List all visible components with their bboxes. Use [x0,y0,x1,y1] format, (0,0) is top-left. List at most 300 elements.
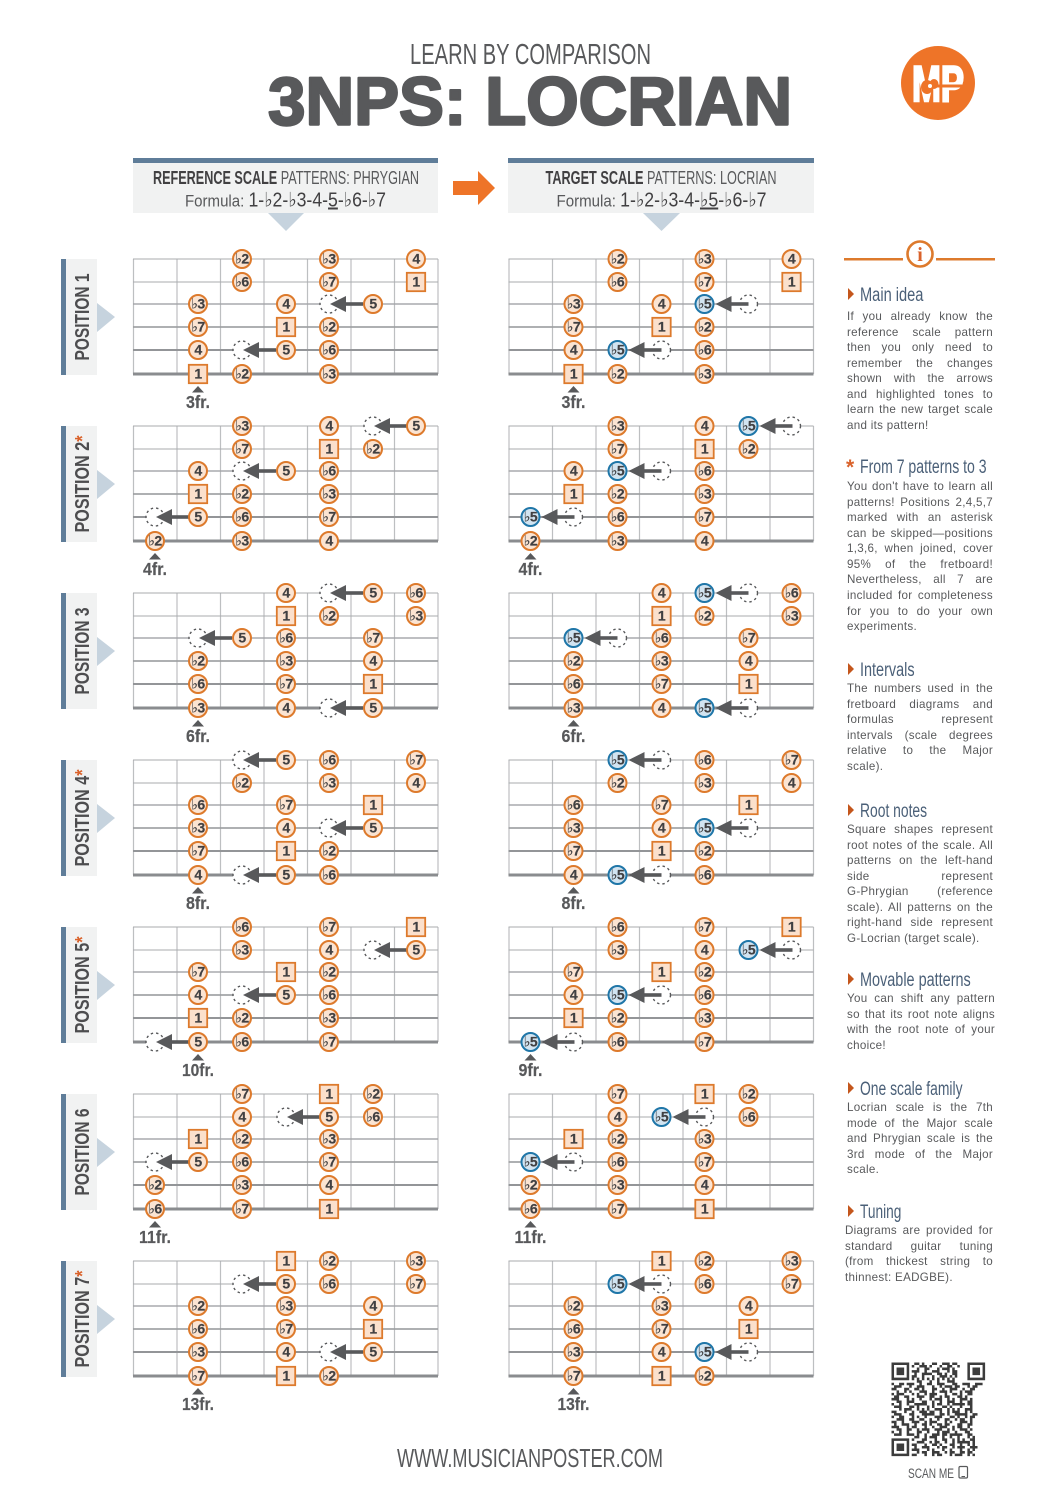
notes: ♭7 [611,1200,625,1216]
notes: ♭2 [235,366,249,382]
fret label: 3fr. [186,392,210,412]
notes: ♭6 [698,462,712,478]
arrows: changed notes: 5 [412,942,420,958]
text block: and its pattern! [847,419,928,432]
notes: 4 [570,866,578,882]
text block: Nevertheless, all 7 are [847,573,993,586]
notes: ♭2 [611,1130,625,1146]
notes: ♭6 [235,1154,249,1170]
notes: 4 [570,986,578,1002]
notes: 4 [745,652,753,668]
notes: 4 [325,532,333,548]
notes: ♭2 [322,608,336,624]
notes [564,1252,800,1385]
notes: ♭7 [279,1320,293,1336]
notes: ♭3 [191,700,205,716]
text block: 1,3,6, when joined, cover [847,542,993,555]
heading asterisk: * [846,456,854,479]
notes: ♭2 [742,440,756,456]
arrows: changed notes: 5 [282,462,290,478]
arrows: changed notes: ♭5 [611,986,625,1002]
notes: ♭3 [698,366,712,382]
notes: ♭7 [235,440,249,456]
panel: tuning [845,1202,993,1284]
text block: intervals (scale degrees [847,729,993,742]
arrows: changed notes: 5 [369,584,377,600]
notes: ♭7 [698,918,712,934]
notes: 1 [369,796,377,812]
arrows: changed notes [608,1275,758,1361]
notes: ♭6 [611,1034,625,1050]
text block: Locrian scale is the 7th [847,1101,993,1114]
text block: for you to do your own [847,604,993,618]
logo: MP guitar badge: MP [912,56,964,112]
notes: ♭6 [322,866,336,882]
panel: from 7 patterns to 3 [846,456,993,633]
heading marker [848,973,854,985]
notes: ♭6 [409,584,423,600]
notes: ♭2 [366,1086,380,1102]
notes: ♭3 [698,774,712,790]
notes: ♭6 [567,796,581,812]
notes: ♭7 [322,274,336,290]
notes: ♭7 [698,1034,712,1050]
arrows: changed notes [189,584,382,717]
notes: ♭2 [322,842,336,858]
notes: ♭7 [366,630,380,646]
position tab 2: POSITION 2* [71,435,94,532]
notes: ♭2 [524,532,538,548]
notes: 1 [282,964,290,980]
header: reference scale: REFERENCE SCALE PATTERNS: PHRYGIAN [153,167,419,188]
notes: ♭7 [322,1154,336,1170]
panel: movable patterns [847,970,995,1052]
position tab 7 [61,1261,115,1377]
arrows: changed notes: 5 [282,866,290,882]
arrows: changed notes: 5 [194,508,202,524]
text block: thinnest: EADGBE). [845,1271,953,1284]
text block: relative to the Major [847,744,993,757]
footer url: WWW.MUSICIANPOSTER.COM [397,1443,663,1473]
text block: remember the changes [847,357,993,370]
notes: 1 [369,1320,377,1336]
position tab 1 [61,259,115,375]
notes: ♭2 [698,842,712,858]
text block: root notes of the scale. All [847,839,993,852]
text block: You can shift any pattern [847,992,995,1005]
notes: ♭6 [322,342,336,358]
notes: ♭6 [322,462,336,478]
fret label: 4fr. [518,559,542,579]
text block [847,823,993,945]
notes: ♭6 [235,274,249,290]
notes: ♭2 [611,486,625,502]
notes: ♭2 [567,1298,581,1314]
text block: patterns on the left-hand [847,854,993,867]
notes: 4 [412,250,420,266]
text block: You don't have to learn all [847,480,993,493]
position tab 3: POSITION 3 [71,608,94,694]
notes [189,584,425,717]
notes: 4 [570,342,578,358]
icon: info with rule lines [844,242,995,266]
header: reference scale [133,158,438,231]
notes: 4 [282,584,290,600]
arrows: changed notes: 5 [194,1154,202,1170]
position tab 4: POSITION 4* [71,769,94,866]
notes: ♭6 [698,1276,712,1292]
notes: 1 [570,366,578,382]
notes: ♭6 [366,1108,380,1124]
notes: ♭3 [409,1252,423,1268]
fret label: 13fr. [558,1394,590,1414]
position tab 7: POSITION 7* [71,1270,94,1367]
notes: 1 [745,1320,753,1336]
notes: ♭3 [322,1010,336,1026]
notes: ♭3 [698,250,712,266]
notes: 1 [325,1086,333,1102]
notes: 4 [412,774,420,790]
arrows: changed notes: ♭5 [567,630,581,646]
notes: 1 [658,1252,666,1268]
heading marker [848,804,854,816]
notes: 1 [325,440,333,456]
arrows: changed notes [564,584,758,717]
notes: 4 [282,700,290,716]
notes: 4 [194,342,202,358]
notes: ♭7 [235,1200,249,1216]
notes: 1 [570,486,578,502]
notes: 4 [282,296,290,312]
notes [564,584,800,717]
arrows: changed notes [146,941,425,1051]
position tab 1: POSITION 1 [71,274,94,360]
notes: ♭3 [698,486,712,502]
notes: ♭2 [191,652,205,668]
notes: ♭3 [279,1298,293,1314]
notes: ♭2 [235,486,249,502]
notes: ♭2 [148,532,162,548]
notes: ♭3 [322,366,336,382]
notes: 1 [194,486,202,502]
arrows: changed notes [608,751,758,884]
notes [564,250,801,383]
notes: ♭6 [611,274,625,290]
notes: ♭3 [235,418,249,434]
notes: 1 [282,1368,290,1384]
notes: ♭7 [235,1086,249,1102]
fret label: 9fr. [518,1060,542,1080]
text block: and Phrygian scale is the [847,1132,993,1145]
notes: 1 [658,842,666,858]
notes: ♭7 [698,508,712,524]
notes: 1 [570,1010,578,1026]
notes: ♭7 [191,318,205,334]
heading: movable patterns: Movable patterns [860,970,971,990]
heading: tuning: Tuning [860,1202,901,1222]
notes: ♭6 [698,866,712,882]
position tab 5 [61,927,115,1043]
heading marker [848,663,854,675]
notes: ♭3 [611,418,625,434]
text block: (from thickest string to [845,1255,993,1268]
text block: right-hand side represent [847,916,993,929]
notes: ♭2 [191,1298,205,1314]
notes: 4 [701,1176,709,1192]
notes: ♭6 [322,1276,336,1292]
arrows: changed notes: ♭5 [698,1344,712,1360]
text block [847,310,993,432]
notes: 1 [788,918,796,934]
arrows: changed notes: ♭5 [698,820,712,836]
notes: ♭7 [279,676,293,692]
notes: 1 [194,366,202,382]
notes: ♭7 [567,842,581,858]
notes: 1 [701,1200,709,1216]
notes: ♭3 [409,608,423,624]
notes: ♭7 [742,630,756,646]
panel: main idea [847,284,993,432]
notes: 1 [325,1200,333,1216]
notes [522,417,758,550]
title: 3NPS Locrian: 3NPS: LOCRIAN [268,64,792,140]
text block [847,480,993,633]
notes: ♭2 [366,440,380,456]
text block [847,1101,993,1176]
arrows: changed notes: 5 [282,986,290,1002]
notes: 1 [658,964,666,980]
heading marker [848,288,854,300]
text block: marked with an asterisk [847,511,993,524]
notes [146,1085,382,1218]
notes: ♭3 [235,942,249,958]
notes: ♭3 [191,296,205,312]
notes: ♭6 [191,676,205,692]
arrows: changed notes: 5 [369,296,377,312]
notes: 4 [194,462,202,478]
notes: 1 [701,1086,709,1102]
fret label: 10fr. [182,1060,214,1080]
text block: 95% of the fretboard! [847,558,993,571]
notes: ♭6 [322,752,336,768]
notes: ♭2 [322,1368,336,1384]
notes: ♭6 [148,1200,162,1216]
notes: ♭2 [698,1252,712,1268]
notes: ♭2 [148,1176,162,1192]
notes: ♭2 [235,250,249,266]
text block: experiments. [847,620,917,633]
notes: ♭2 [698,964,712,980]
notes: ♭6 [698,752,712,768]
notes: ♭3 [567,820,581,836]
notes: 4 [614,1108,622,1124]
notes: 4 [701,418,709,434]
notes: ♭3 [322,774,336,790]
notes: ♭6 [611,1154,625,1170]
fret label: 4fr. [143,559,167,579]
notes: ♭2 [742,1086,756,1102]
notes: 4 [238,1108,246,1124]
fretboard: position 7 target [508,1252,814,1414]
notes: 4 [369,1298,377,1314]
notes: ♭7 [567,964,581,980]
notes: ♭7 [322,918,336,934]
notes: 1 [282,1252,290,1268]
notes: 4 [658,296,666,312]
fret label: 3fr. [562,392,586,412]
panel: intervals [847,660,993,773]
text block: Square shapes represent [847,823,993,836]
notes: ♭7 [191,842,205,858]
notes: ♭6 [279,630,293,646]
text block: If you already know the [847,310,993,323]
arrows: changed notes: ♭5 [611,866,625,882]
notes: ♭6 [191,796,205,812]
notes: ♭7 [785,752,799,768]
notes: ♭3 [191,1344,205,1360]
notes: 4 [325,942,333,958]
text block: then you only need to [847,341,993,354]
heading: one scale family: One scale family [860,1078,963,1100]
arrows: changed notes: 5 [369,700,377,716]
text block [847,992,995,1052]
notes: ♭3 [611,942,625,958]
notes: 1 [701,440,709,456]
position tab 4 [61,760,115,876]
notes: 1 [194,1010,202,1026]
notes: 4 [788,250,796,266]
notes: ♭7 [785,1276,799,1292]
notes: 1 [570,1130,578,1146]
notes: ♭7 [611,440,625,456]
notes: ♭2 [611,366,625,382]
heading marker [848,1082,854,1094]
notes [146,417,382,550]
arrows: changed notes: ♭5 [611,342,625,358]
notes: 1 [745,796,753,812]
title group [268,39,792,140]
notes: ♭3 [655,652,669,668]
notes: ♭7 [655,1320,669,1336]
arrows: changed notes [522,417,800,526]
notes [189,250,425,383]
arrows: changed notes: 5 [412,418,420,434]
notes: 4 [369,652,377,668]
notes: ♭3 [235,532,249,548]
panel: root notes [847,800,993,945]
notes: ♭7 [279,796,293,812]
arrows: changed notes: 5 [369,1344,377,1360]
notes: ♭2 [235,1130,249,1146]
fret label: 13fr. [182,1394,214,1414]
header: reference scale: Formula: 1-♭2-♭3-4-5-♭6-♭7 [185,190,386,212]
notes: 4 [282,820,290,836]
arrows: changed notes: ♭5 [698,296,712,312]
notes: ♭2 [524,1176,538,1192]
text block: The numbers used in the [847,682,993,695]
text block: shown with the arrows [847,372,993,385]
fret label: 11fr. [139,1227,171,1247]
notes: ♭3 [785,1252,799,1268]
notes [189,751,425,884]
notes: 4 [194,986,202,1002]
arrows: changed notes: ♭5 [611,1276,625,1292]
arrows: changed notes: 5 [282,1276,290,1292]
arrows: changed notes: ♭5 [742,942,756,958]
arrows: changed notes: 5 [238,630,246,646]
arrows: changed notes: ♭5 [698,584,712,600]
arrows: changed notes: 5 [369,820,377,836]
text block [847,682,993,773]
notes: ♭6 [235,1034,249,1050]
notes: ♭2 [322,1252,336,1268]
text block: G-Phrygian (reference [847,885,993,898]
notes: ♭3 [322,486,336,502]
notes: ♭2 [698,1368,712,1384]
notes: 4 [658,820,666,836]
text block: can be skipped—positions [847,527,993,540]
notes: ♭3 [279,652,293,668]
fretboard: position 1 reference [133,250,438,412]
text block: included for completeness [847,589,993,602]
notes: ♭2 [235,774,249,790]
notes: ♭2 [322,318,336,334]
notes: 4 [194,866,202,882]
notes: ♭7 [611,1086,625,1102]
text block: and highlighted tones to [847,388,993,401]
text block: Diagrams are provided for [845,1224,993,1237]
fretboard: position 3 reference [133,584,438,746]
arrows: changed notes [233,1275,382,1361]
arrows: changed notes: 5 [282,752,290,768]
arrows: changed notes: ♭5 [524,1154,538,1170]
notes: ♭6 [655,630,669,646]
arrows: changed notes: ♭5 [742,418,756,434]
notes: 1 [194,1130,202,1146]
notes: 4 [745,1298,753,1314]
text block: scale). All patterns on the [847,901,993,914]
kicker: learn by comparison: LEARN BY COMPARISON [410,39,651,71]
arrow: reference to target [453,171,495,205]
notes: ♭7 [322,508,336,524]
fretboard: position 3 target [508,584,814,746]
notes: 1 [282,608,290,624]
arrows: changed notes [233,295,382,359]
notes: 1 [658,1368,666,1384]
text block [845,1224,993,1284]
text block: formulas represent [847,713,993,726]
notes: ♭2 [611,250,625,266]
notes: ♭3 [698,1010,712,1026]
notes: ♭2 [567,652,581,668]
arrows: changed notes: ♭5 [524,508,538,524]
text block: mode of the Major scale [847,1117,993,1130]
notes: 1 [788,274,796,290]
text block: standard guitar tuning [845,1240,993,1253]
scan me label with phone icon: SCAN ME [908,1466,954,1481]
notes: ♭3 [567,1344,581,1360]
position tab 2 [61,426,115,542]
notes [564,918,801,1051]
notes: 1 [745,676,753,692]
notes: ♭7 [409,1276,423,1292]
notes: ♭7 [655,796,669,812]
notes: ♭7 [191,964,205,980]
text block: scale). [847,760,883,773]
notes: ♭3 [698,1130,712,1146]
arrows: changed notes: ♭5 [655,1108,669,1124]
notes: ♭6 [191,1320,205,1336]
